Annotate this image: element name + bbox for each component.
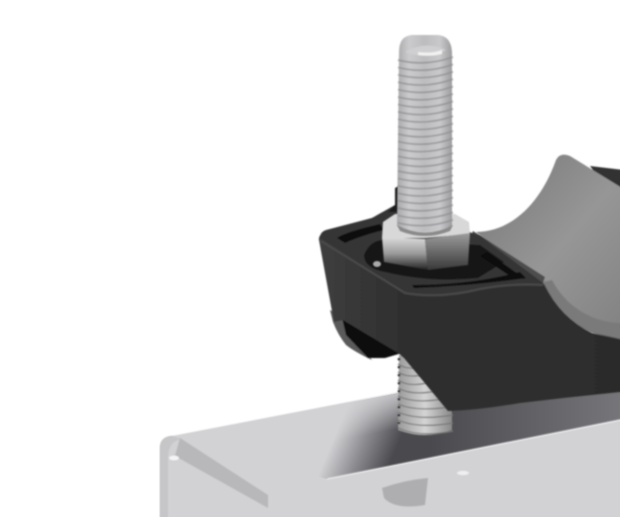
bracket front rim: [321, 241, 543, 295]
metal channel: [159, 391, 620, 517]
nut chamfer: [382, 214, 470, 238]
saddle lip: [543, 280, 620, 341]
lower thread lines: [398, 364, 453, 434]
lower bolt thread: [398, 355, 453, 435]
slot: [382, 478, 428, 506]
back dark edge: [590, 166, 620, 200]
bracket underside: [342, 318, 404, 358]
shadow under bracket: [322, 391, 620, 479]
grey saddle cushion: [470, 155, 620, 342]
slot highlight: [457, 471, 469, 475]
right slit: [480, 252, 525, 279]
lower bolt shaft: [398, 355, 452, 435]
nut left face: [382, 237, 428, 270]
back tab: [388, 186, 399, 212]
channel left wall: [160, 436, 182, 517]
black bracket: [319, 186, 620, 411]
recess around nut: [364, 240, 504, 280]
upper thread lines: [398, 57, 453, 226]
channel diagonal flange: [175, 438, 268, 508]
bolt tip glint: [418, 50, 442, 56]
upper bolt: [397, 35, 453, 236]
bracket front body: [319, 205, 620, 411]
channel surface and front face: [160, 346, 620, 517]
thread base shadow: [397, 225, 453, 236]
bolt tip highlight: [405, 45, 446, 56]
illustration: bolt, clamp bracket and metal channel: [159, 34, 620, 517]
front edge highlight: [327, 416, 620, 479]
bracket grey sliver: [330, 310, 372, 360]
saddle rim: [470, 231, 545, 286]
washer glint: [373, 261, 381, 267]
hex nut: [373, 214, 470, 270]
bolt shaft: [397, 35, 452, 232]
front slit: [412, 272, 526, 288]
nut right face: [425, 233, 470, 270]
bracket top surface: [320, 208, 543, 294]
lower thread edge dots: [398, 358, 400, 424]
flange corner highlight: [169, 456, 179, 460]
saddle inner surface: [476, 155, 620, 342]
top recess left: [337, 224, 384, 243]
